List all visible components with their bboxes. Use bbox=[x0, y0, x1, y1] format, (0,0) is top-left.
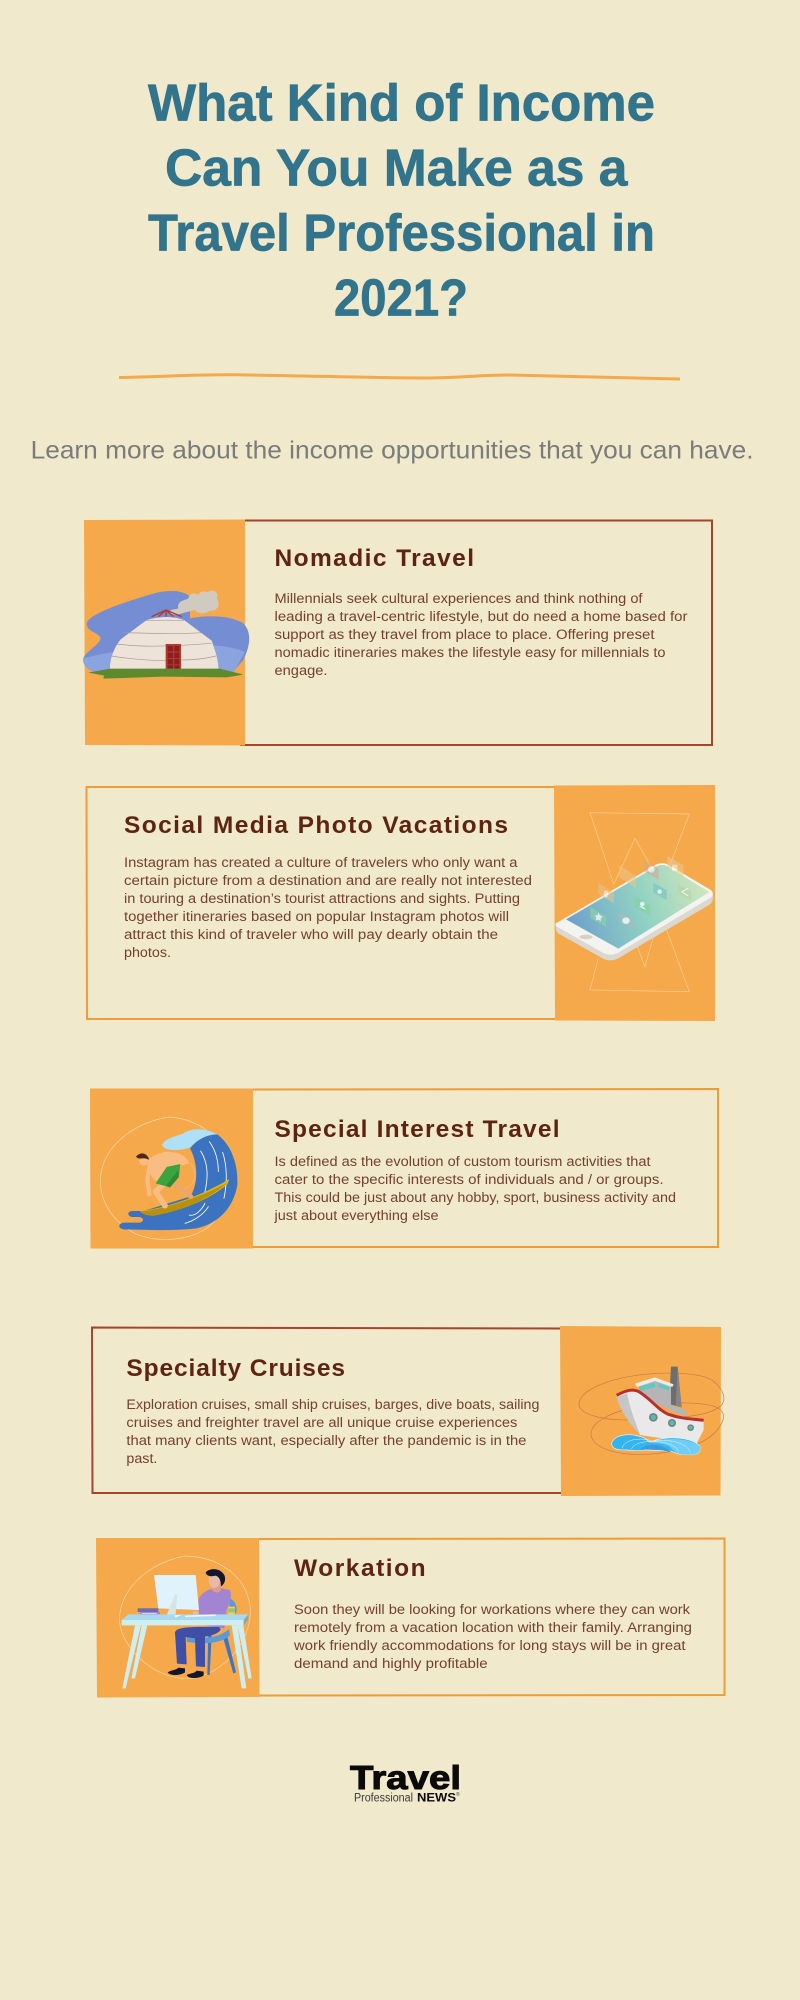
divider: hand-drawn orange line bbox=[119, 375, 680, 379]
body text bbox=[126, 1397, 539, 1467]
title: 2021? bbox=[334, 270, 468, 328]
panel: specialty cruises bbox=[92, 1326, 724, 1496]
panel: special interest travel bbox=[90, 1088, 718, 1248]
logo: Travel Professional News: NEWS bbox=[417, 1791, 456, 1805]
body text bbox=[274, 591, 688, 679]
body text: engage. bbox=[274, 663, 328, 679]
body text: leading a travel-centric lifestyle, but do need a home based for bbox=[274, 609, 688, 625]
body text: work friendly accommodations for long stays will be in great bbox=[293, 1638, 686, 1654]
body text: Exploration cruises, small ship cruises, barges, dive boats, sailing bbox=[126, 1397, 539, 1413]
heading: Social Media Photo Vacations bbox=[124, 812, 508, 839]
body text: just about everything else bbox=[273, 1208, 439, 1224]
body text: certain picture from a destination and are really not interested bbox=[124, 873, 532, 889]
heading: Specialty Cruises bbox=[126, 1355, 345, 1382]
icon: smartphone bbox=[555, 813, 713, 992]
orange block bbox=[96, 1538, 260, 1698]
subtitle: Learn more about the income opportunities that you can have. bbox=[31, 436, 754, 464]
body text: Soon they will be looking for workations where they can work bbox=[294, 1602, 691, 1618]
logo: Travel Professional News: ® bbox=[456, 1791, 460, 1798]
title bbox=[148, 75, 655, 328]
icon: surfer on wave bbox=[100, 1117, 237, 1239]
panel border bbox=[250, 1089, 718, 1247]
body text bbox=[124, 855, 532, 961]
heading: Nomadic Travel bbox=[274, 545, 474, 572]
logo: Travel Professional News bbox=[350, 1759, 461, 1805]
body text bbox=[293, 1602, 692, 1672]
title: What Kind of Income bbox=[148, 75, 655, 133]
logo: Travel Professional News: Travel bbox=[350, 1759, 461, 1796]
body text: Instagram has created a culture of travelers who only want a bbox=[124, 855, 518, 871]
body text: nomadic itineraries makes the lifestyle easy for millennials to bbox=[274, 645, 666, 661]
body text: cruises and freighter travel are all unique cruise experiences bbox=[126, 1415, 517, 1431]
body text: Millennials seek cultural experiences and think nothing of bbox=[274, 591, 643, 607]
title: Travel Professional in bbox=[148, 205, 655, 263]
orange block bbox=[90, 1088, 253, 1248]
panel border bbox=[240, 520, 712, 745]
body text: cater to the specific interests of individuals and / or groups. bbox=[274, 1172, 664, 1188]
body text: past. bbox=[126, 1451, 157, 1467]
orange block bbox=[560, 1326, 721, 1496]
panel: social media photo vacations bbox=[86, 785, 715, 1021]
body text: photos. bbox=[124, 945, 171, 961]
panel border bbox=[86, 787, 560, 1019]
orange block bbox=[554, 785, 715, 1021]
orange block bbox=[84, 520, 245, 746]
icon: cruise ship bbox=[579, 1367, 724, 1455]
body text: that many clients want, especially after the pandemic is in the bbox=[126, 1433, 527, 1449]
panel: workation bbox=[96, 1538, 724, 1698]
body text: in touring a destination’s tourist attractions and sights. Putting bbox=[124, 891, 520, 907]
icon: person at desk bbox=[120, 1556, 252, 1688]
heading: Workation bbox=[294, 1555, 426, 1582]
body text: This could be just about any hobby, sport, business activity and bbox=[274, 1190, 676, 1206]
body text: Is defined as the evolution of custom tourism activities that bbox=[274, 1154, 651, 1170]
body text: demand and highly profitable bbox=[294, 1656, 488, 1672]
body text: together itineraries based on popular Instagram photos will bbox=[124, 909, 509, 925]
body text: support as they travel from place to place. Offering preset bbox=[274, 627, 655, 643]
icon: yurt bbox=[83, 591, 249, 679]
title: Can You Make as a bbox=[165, 140, 629, 198]
body text: attract this kind of traveler who will pay dearly obtain the bbox=[124, 927, 498, 943]
heading: Special Interest Travel bbox=[274, 1116, 560, 1143]
panel border bbox=[255, 1538, 724, 1696]
logo: Travel Professional News: Professional bbox=[354, 1793, 413, 1805]
panel: nomadic travel bbox=[83, 520, 712, 746]
body text: remotely from a vacation location with their family. Arranging bbox=[294, 1620, 692, 1636]
body text bbox=[273, 1154, 676, 1224]
panel border bbox=[92, 1328, 565, 1493]
